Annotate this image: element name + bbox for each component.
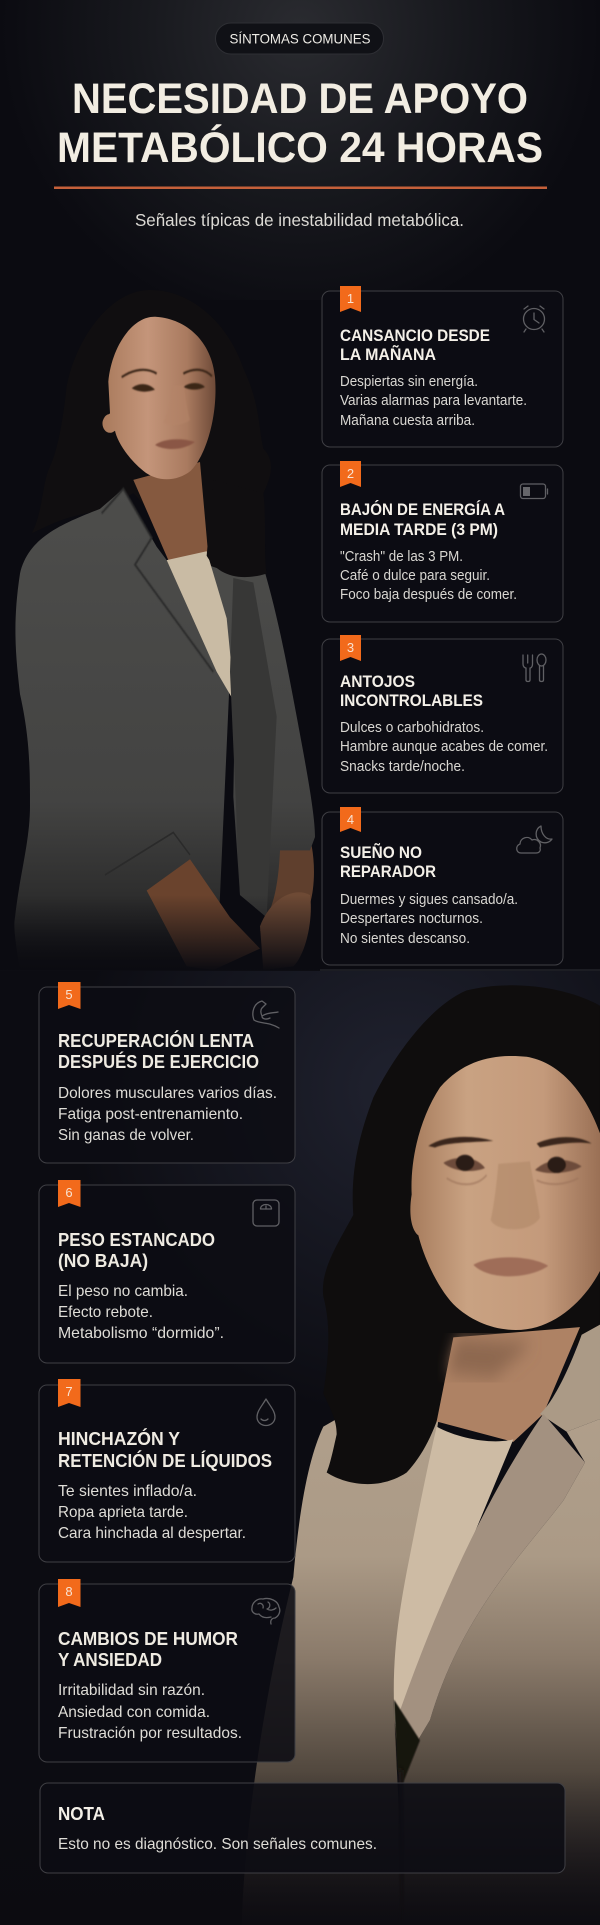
- text 5: Dolores musculares varios días.: [58, 1085, 277, 1102]
- card 7: hinchazón: [39, 1379, 295, 1562]
- icon: battery: [520, 484, 548, 498]
- heading 8: Y ANSIEDAD: [58, 1650, 162, 1670]
- heading 2: BAJÓN DE ENERGÍA A: [340, 500, 505, 519]
- text 3: Hambre aunque acabes de comer.: [340, 739, 548, 755]
- nota text: Esto no es diagnóstico. Son señales comunes.: [58, 1836, 377, 1853]
- bookmark 1: [340, 286, 361, 312]
- card 2: bajón de energía: [322, 461, 563, 622]
- heading 4: REPARADOR: [340, 862, 436, 881]
- text 7: Cara hinchada al despertar.: [58, 1525, 246, 1542]
- card 3: antojos: [322, 635, 563, 793]
- text 6: Efecto rebote.: [58, 1304, 153, 1321]
- text 3: [340, 720, 548, 775]
- bookmark 3: [340, 635, 361, 661]
- heading 6: (NO BAJA): [58, 1251, 148, 1271]
- text 8: Frustración por resultados.: [58, 1725, 242, 1742]
- text 6: El peso no cambia.: [58, 1283, 188, 1300]
- text 2: [340, 549, 517, 603]
- bookmark 6: 6: [65, 1185, 73, 1200]
- heading 5: RECUPERACIÓN LENTA: [58, 1030, 254, 1051]
- heading 5: DESPUÉS DE EJERCICIO: [58, 1051, 259, 1072]
- text 6: Metabolismo “dormido”.: [58, 1325, 224, 1342]
- title: METABÓLICO 24 HORAS: [57, 123, 543, 172]
- heading 6: PESO ESTANCADO: [58, 1230, 215, 1250]
- icon: flexed arm: [253, 1001, 279, 1028]
- text 2: "Crash" de las 3 PM.: [340, 549, 463, 565]
- bookmark 5: 5: [65, 987, 73, 1002]
- text 7: Ropa aprieta tarde.: [58, 1504, 188, 1521]
- bookmark 7: [58, 1379, 80, 1407]
- text 6: [58, 1283, 224, 1342]
- card 6: peso estancado: [39, 1180, 295, 1363]
- text 8: [58, 1682, 242, 1742]
- text 4: Despertares nocturnos.: [340, 911, 483, 927]
- heading 1: CANSANCIO DESDE: [340, 326, 490, 345]
- bookmark 7: 7: [65, 1384, 73, 1399]
- panel: nota: [40, 1783, 565, 1873]
- heading 1: [340, 326, 490, 364]
- text 1: Mañana cuesta arriba.: [340, 413, 475, 429]
- bookmark 4: [340, 807, 361, 832]
- bookmark 1: 1: [347, 291, 354, 306]
- text 3: Snacks tarde/noche.: [340, 759, 465, 775]
- heading 6: [58, 1230, 215, 1271]
- bookmark 5: [58, 982, 80, 1009]
- text 4: Duermes y sigues cansado/a.: [340, 892, 518, 908]
- text 3: Dulces o carbohidratos.: [340, 720, 484, 736]
- card 5: recuperación lenta: [39, 982, 295, 1163]
- heading 8: CAMBIOS DE HUMOR: [58, 1629, 238, 1649]
- heading 7: RETENCIÓN DE LÍQUIDOS: [58, 1450, 272, 1471]
- icon: scale: [253, 1200, 279, 1226]
- bookmark 2: 2: [347, 466, 354, 481]
- heading 1: LA MAÑANA: [340, 344, 436, 364]
- bookmark 6: [58, 1180, 80, 1207]
- text 8: Ansiedad con comida.: [58, 1704, 210, 1721]
- text 1: Varias alarmas para levantarte.: [340, 393, 527, 409]
- card 1: cansancio desde la mañana: [322, 286, 563, 447]
- heading 8: [58, 1629, 238, 1670]
- heading 3: ANTOJOS: [340, 672, 415, 691]
- bookmark 8: 8: [65, 1584, 73, 1599]
- bookmark 3: 3: [347, 640, 354, 655]
- badge: síntomas comunes: [216, 23, 384, 54]
- heading 4: [340, 842, 436, 881]
- text 7: [58, 1483, 246, 1542]
- icon: fork and spoon: [523, 654, 546, 682]
- bookmark 8: [58, 1579, 80, 1607]
- subtitle: Señales típicas de inestabilidad metabólica.: [135, 210, 464, 230]
- text 7: Te sientes inflado/a.: [58, 1483, 197, 1500]
- text 4: No sientes descanso.: [340, 931, 470, 947]
- portrait: woman in grey blazer: [0, 290, 320, 971]
- text 4: [340, 892, 518, 947]
- text 5: [58, 1085, 277, 1144]
- text 5: Sin ganas de volver.: [58, 1127, 194, 1144]
- heading 3: [340, 672, 483, 710]
- card 4: sueño no reparador: [322, 807, 563, 965]
- icon: moon and cloud: [517, 826, 552, 853]
- title: NECESIDAD DE APOYO: [72, 75, 528, 123]
- text 5: Fatiga post-entrenamiento.: [58, 1106, 243, 1123]
- text 2: Café o dulce para seguir.: [340, 568, 490, 584]
- heading 4: SUEÑO NO: [340, 842, 422, 862]
- nota heading: NOTA: [58, 1804, 105, 1824]
- card 8: cambios de humor: [39, 1579, 295, 1762]
- title: [57, 75, 543, 172]
- text 8: Irritabilidad sin razón.: [58, 1682, 205, 1699]
- heading 7: [58, 1428, 272, 1471]
- heading 5: [58, 1030, 259, 1072]
- text 2: Foco baja después de comer.: [340, 587, 517, 603]
- icon: water drop: [257, 1399, 275, 1426]
- portrait: woman in beige blazer: [242, 985, 600, 1925]
- bookmark 2: [340, 461, 361, 487]
- text 1: Despiertas sin energía.: [340, 374, 478, 390]
- heading 7: HINCHAZÓN Y: [58, 1428, 180, 1449]
- icon: brain: [252, 1598, 280, 1624]
- heading 2: [340, 500, 505, 539]
- heading 3: INCONTROLABLES: [340, 691, 483, 710]
- text 1: [340, 374, 527, 429]
- divider rule: [54, 186, 547, 189]
- bottom fade: [0, 1770, 600, 1925]
- bookmark 4: 4: [347, 812, 354, 827]
- icon: alarm clock: [524, 306, 544, 332]
- badge: síntomas comunes: SÍNTOMAS COMUNES: [230, 32, 370, 46]
- heading 2: MEDIA TARDE (3 PM): [340, 520, 498, 539]
